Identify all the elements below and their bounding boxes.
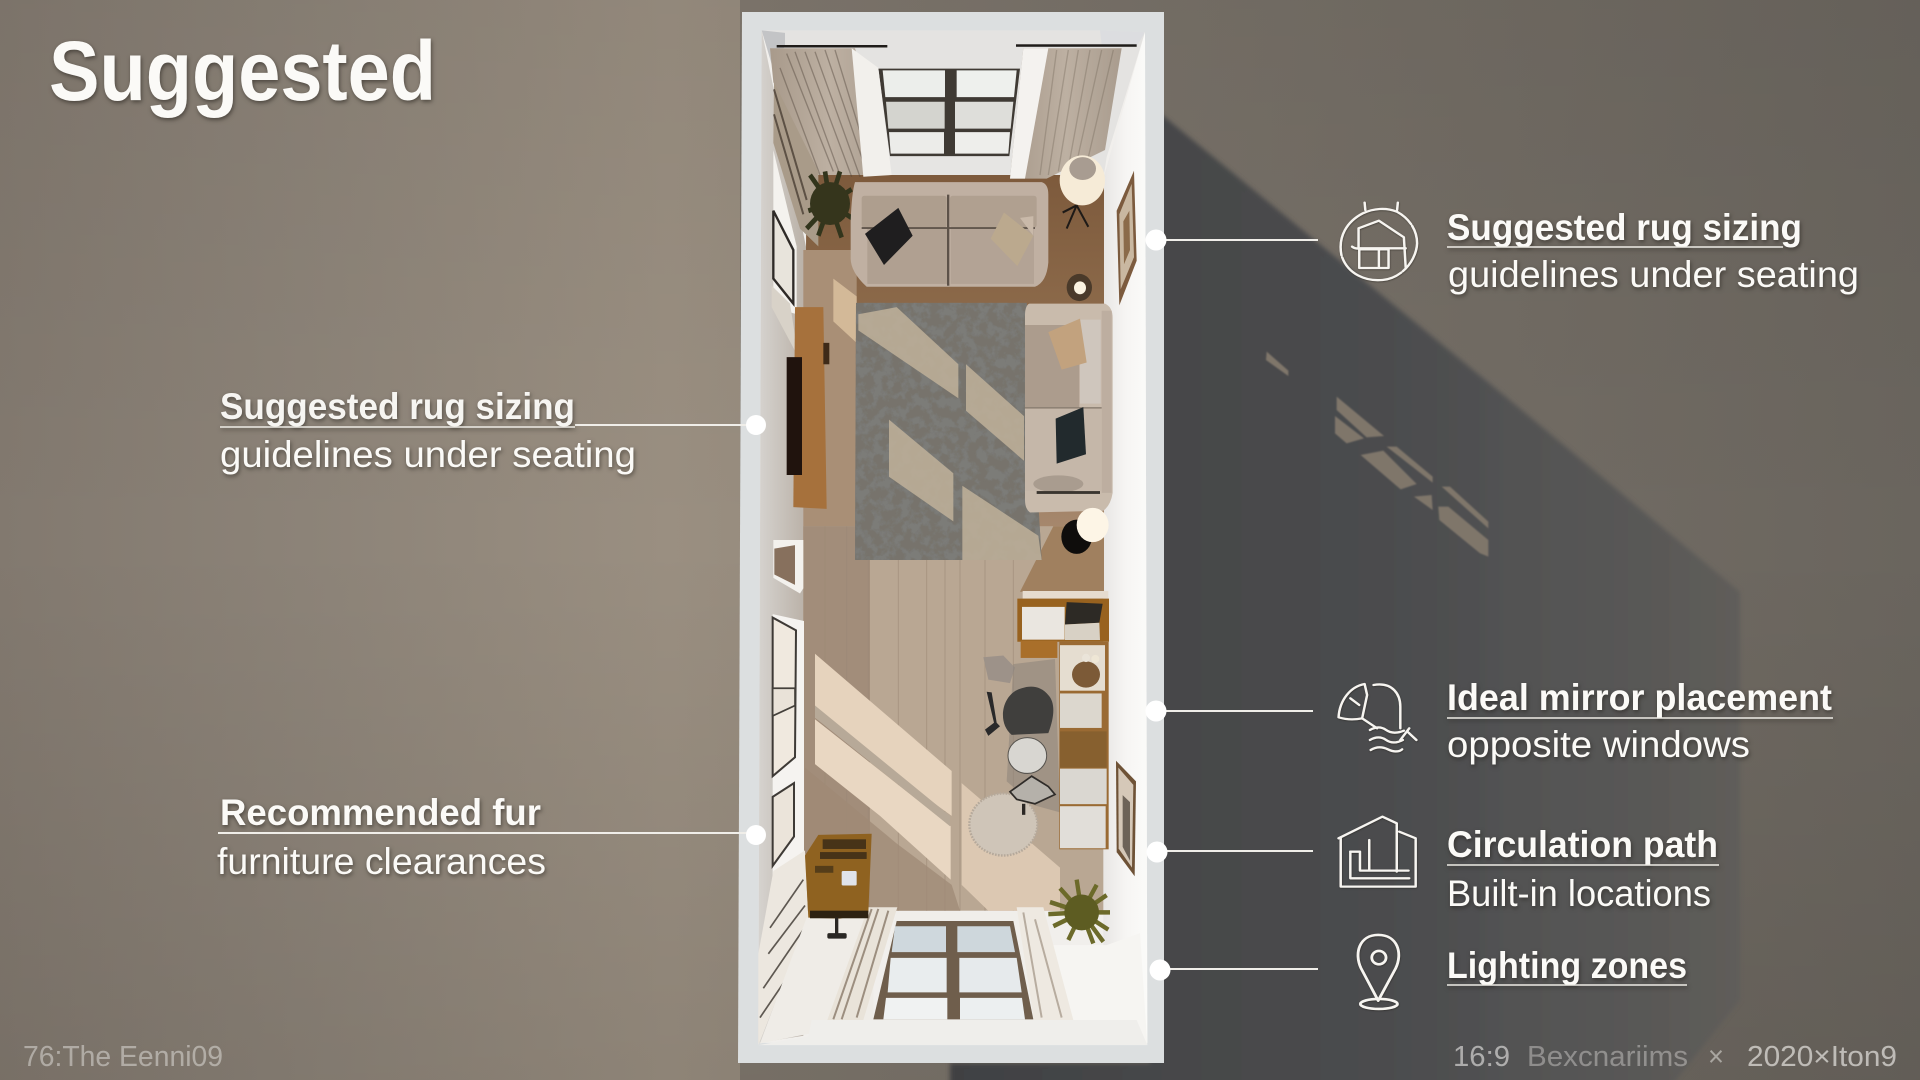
sofa top <box>851 182 1048 287</box>
left lower curtain <box>758 850 808 1045</box>
interior walls <box>758 30 1147 1043</box>
footer right <box>1453 1041 1897 1073</box>
footer right: 16:9 <box>1453 1041 1510 1073</box>
callout lines and dots <box>218 230 1318 980</box>
right label: circulation path <box>1447 824 1719 914</box>
office chair and stools <box>983 656 1060 815</box>
icon: house in circle <box>1341 203 1417 280</box>
wood floor <box>803 175 1104 546</box>
sunlight on floor <box>815 654 952 816</box>
standing lamp top <box>1060 155 1105 229</box>
footer left: 76:The Eenni09 <box>23 1041 223 1073</box>
footer right: 2020×Iton9 <box>1747 1041 1897 1073</box>
sunlight top floor edge <box>833 279 857 343</box>
sunlight patches inside shadow <box>1266 352 1488 557</box>
title: Suggested <box>49 24 436 118</box>
right label: circulation path: Circulation path <box>1447 824 1718 865</box>
right label: mirror placement <box>1447 677 1833 765</box>
right label: rug sizing: guidelines under seating <box>1448 254 1859 295</box>
rug <box>855 303 1042 560</box>
right label: mirror placement: opposite windows <box>1447 724 1750 765</box>
icon: location pin <box>1358 935 1399 1009</box>
outer wall frame <box>738 12 1164 1063</box>
lower white floor area <box>760 911 873 1043</box>
round rug <box>969 793 1037 856</box>
footer right: × <box>1708 1041 1724 1073</box>
TV console <box>787 307 829 509</box>
right label: rug sizing: Suggested rug sizing <box>1447 207 1802 248</box>
sofa right <box>1025 304 1113 512</box>
icon: mirror and waves <box>1339 684 1416 751</box>
room cast shadow <box>950 105 1740 1080</box>
upper left window <box>772 150 798 357</box>
side plant top <box>807 171 852 237</box>
left label: furniture clearances: furniture clearances <box>217 841 546 882</box>
floor plan room <box>738 12 1164 1063</box>
lamp lower <box>1061 508 1109 554</box>
lower floor planks and sunlight <box>803 526 1104 911</box>
lower curtains <box>827 907 1073 1020</box>
right label: rug sizing <box>1447 207 1859 295</box>
right label: lighting zones: Lighting zones <box>1447 945 1687 986</box>
right label: mirror placement: Ideal mirror placement <box>1447 677 1832 718</box>
icon: house plan <box>1339 817 1416 887</box>
left label: rug sizing: Suggested rug sizing <box>220 386 575 427</box>
right label: circulation path: Built-in locations <box>1447 873 1711 914</box>
wall picture upper right <box>1117 171 1137 305</box>
floor light <box>1067 274 1092 301</box>
left label: furniture clearances <box>217 792 546 882</box>
left label: rug sizing <box>220 386 636 475</box>
lower wall ledge <box>758 1020 1147 1045</box>
right curtain top <box>1010 48 1122 179</box>
curtain rods <box>777 44 1137 47</box>
rug sun patches <box>858 307 1042 560</box>
left label: rug sizing: guidelines under seating <box>220 434 636 475</box>
left label: furniture clearances: Recommended fur <box>220 792 541 833</box>
left wall windows <box>773 614 804 885</box>
footer right: Bexcnariims <box>1527 1041 1688 1073</box>
potted plant lower <box>1048 880 1110 943</box>
window top <box>878 69 1020 175</box>
wooden side table <box>805 834 872 939</box>
left wall picture <box>773 540 803 593</box>
built-in desk and cabinets <box>1017 591 1109 849</box>
wall picture lower right <box>1116 761 1136 876</box>
left curtain top <box>770 48 892 246</box>
lower window <box>873 912 1073 1021</box>
